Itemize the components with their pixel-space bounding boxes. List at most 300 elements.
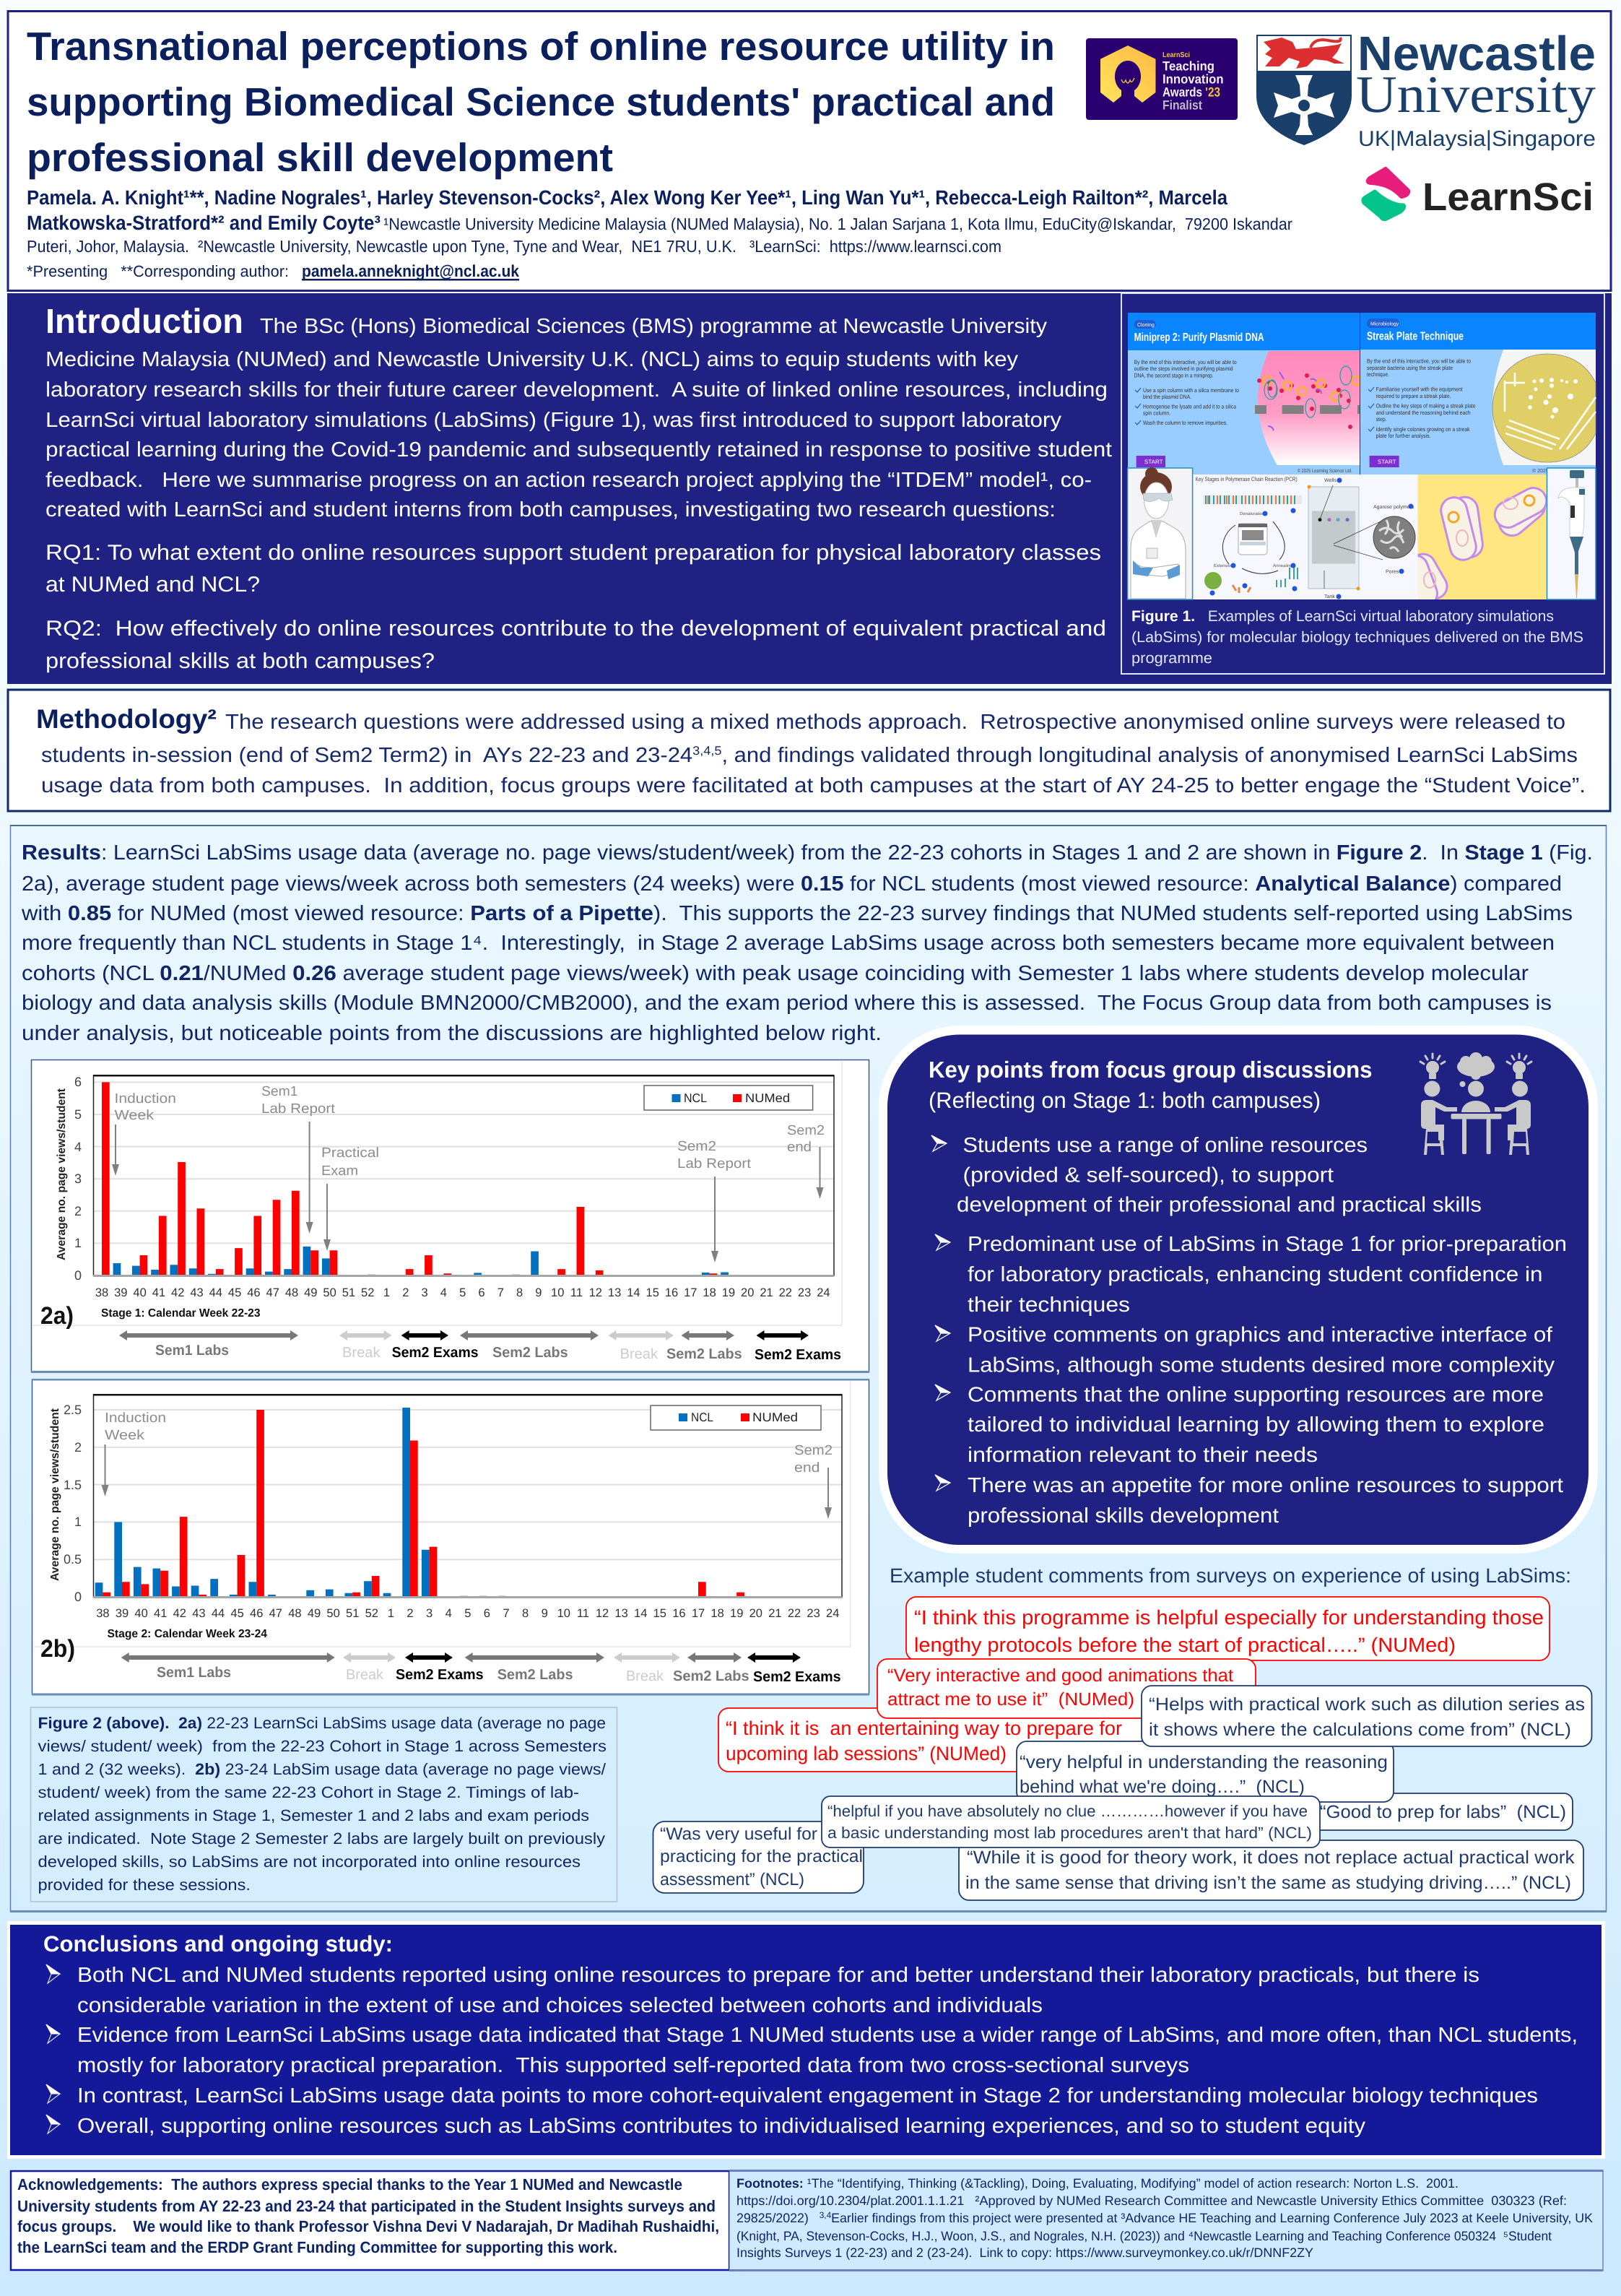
figure 1: miniprep screenshot: bind the plasmid DNA. [1143, 394, 1191, 400]
figure 1: miniprep screenshot [1128, 313, 1360, 475]
2b x axis: 24 [826, 1607, 839, 1620]
2b x axis: 42 [173, 1607, 186, 1620]
authors and affiliations: ¹Newcastle University Medicine Malaysia (NUMed Malaysia), No. 1 Jalan Sarjana 1, Kota Ilmu, EduCity@Iskandar, 79200 Iskandar [383, 215, 1292, 233]
2a y axis: 1 [74, 1236, 82, 1250]
comment: NCL reasoning [1017, 1741, 1394, 1802]
figure 1: streak plate screenshot: By the end of this interactive, you will be able to [1367, 358, 1471, 365]
2a legend: NUMed [745, 1091, 790, 1105]
authors and affiliations: Matkowska-Stratford*² and Emily Coyte³ [27, 212, 381, 234]
2b x axis: 17 [692, 1607, 705, 1620]
key points heading [929, 1057, 1372, 1113]
figure 1: streak plate screenshot: separate bacteria using the streak plate [1367, 365, 1453, 371]
comment: NCL driving analogy: in the same sense that driving isn’t the same as studying driving…..” (NCL) [965, 1873, 1571, 1893]
2b x axis: 40 [134, 1607, 148, 1620]
figure 1: miniprep screenshot: spin column. [1143, 410, 1170, 417]
2a NCL bars [113, 1247, 729, 1275]
figure 2 caption [30, 1707, 617, 1902]
conclusions text: mostly for laboratory practical preparation. This supported self-reported data from two cross-sectional surveys [77, 2054, 1189, 2077]
2a x axis: 44 [209, 1286, 222, 1299]
figure 1: miniprep screenshot: outline the steps involved in purifying plasmid [1134, 365, 1233, 372]
2a x axis: 10 [551, 1286, 564, 1299]
2b annotations: Sem2 [794, 1443, 833, 1458]
2b y axis: Average no. page views/student [49, 1408, 61, 1581]
chart 2b [32, 1379, 869, 1696]
panel: footnotes: Insights Surveys 1 (22-23) and 2 (23-24). Link to copy: https://www.surveymonkey.co.uk/r/DNNF2ZY [736, 2245, 1313, 2260]
2b NCL bars [95, 1408, 506, 1597]
2b timeline: Break [626, 1668, 664, 1684]
key point statements [957, 1134, 1567, 1528]
authors and affiliations: pamela.anneknight@ncl.ac.uk [302, 261, 519, 280]
2a y axis: 0 [74, 1268, 82, 1283]
2a annotations [112, 1084, 825, 1262]
2b x axis: 13 [614, 1607, 628, 1620]
research questions [45, 541, 1106, 673]
2a x axis [95, 1286, 830, 1320]
2b x axis: 4 [446, 1607, 452, 1620]
2b x axis: Stage 2: Calendar Week 23-24 [107, 1628, 267, 1640]
key point statements: Students use a range of online resources [963, 1134, 1368, 1157]
figure 2 caption: views/ student/ week) from the 22-23 Cohort in Stage 1 across Semesters [38, 1737, 607, 1755]
conclusions text: Overall, supporting online resources such as LabSims contributes to individualised learning experiences, and so to student equity [77, 2115, 1366, 2138]
panel: methodology [8, 690, 1610, 811]
2b x axis: 9 [542, 1607, 548, 1620]
2a annotations: Week [114, 1108, 155, 1123]
key point statements: tailored to individual learning by allowing them to explore [968, 1413, 1544, 1437]
2b legend [651, 1405, 821, 1430]
introduction text: feedback. Here we summarise progress on an action research project applying the “ITDEM” model¹, co- [45, 469, 1092, 492]
figure 1: streak plate screenshot: Streak Plate Technique [1367, 331, 1464, 343]
conclusions text: Evidence from LearnSci LabSims usage data indicated that Stage 1 NUMed students use a wider range of LabSims, and more often, than NCL students, [77, 2024, 1578, 2047]
header panel [8, 12, 1611, 290]
logo: LearnSci: LearnSci [1422, 176, 1594, 219]
research questions: RQ1: To what extent do online resources support student preparation for physical laboratory classes [45, 541, 1101, 565]
2a annotations: Sem1 [261, 1084, 297, 1099]
comment: NUMed lengthy protocols [906, 1597, 1550, 1660]
logo: teaching innovation awards finalist: Teaching [1162, 59, 1214, 74]
2a x axis: 15 [646, 1286, 659, 1299]
2b x axis: 18 [710, 1607, 724, 1620]
2a x axis: 4 [440, 1286, 447, 1299]
methodology heading: Methodology² [36, 704, 217, 734]
2a x axis: 12 [589, 1286, 602, 1299]
2b x axis: 38 [96, 1607, 110, 1620]
2a timeline: Break [342, 1345, 381, 1361]
student comments [653, 1597, 1591, 1900]
2a y axis: 2 [74, 1204, 82, 1218]
2a x axis: 11 [570, 1286, 583, 1299]
2b annotations: end [794, 1460, 820, 1476]
2b x axis: 19 [730, 1607, 743, 1620]
figure 1: PCR and gel screenshot: Pores [1386, 569, 1399, 575]
2b x axis: 16 [672, 1607, 686, 1620]
2a label: 2a) [40, 1302, 74, 1330]
figure 1: streak plate screenshot: required to prepare a streak plate. [1376, 393, 1451, 399]
figure 1: streak plate screenshot: Identify single colonies growing on a streak [1376, 426, 1470, 433]
figure 1 caption: Figure 1. Examples of LearnSci virtual laboratory simulations [1131, 608, 1554, 625]
figure 1: miniprep screenshot: DNA, the second stage in a miniprep. [1134, 373, 1214, 379]
2b x axis: 7 [503, 1607, 510, 1620]
figure 2 caption: related assignments in Stage 1, Semester 1 and 2 labs and exam periods [38, 1806, 589, 1824]
2a x axis: 1 [383, 1286, 390, 1299]
2b x axis: 48 [288, 1607, 302, 1620]
figure 2 caption: developed skills, so LabSims are not incorporated into online resources [38, 1853, 581, 1871]
2a y axis [56, 1075, 82, 1283]
2b x axis: 52 [365, 1607, 378, 1620]
logo: teaching innovation awards finalist: Innovation [1162, 72, 1224, 87]
logo: teaching innovation awards finalist [1086, 38, 1238, 120]
2a timeline: Sem2 Exams [392, 1345, 479, 1361]
2a annotations: Induction [114, 1091, 176, 1106]
2b timeline: Sem2 Labs [497, 1667, 573, 1683]
panel: footnotes: https://doi.org/10.2304/plat.2001.1.1.21 ²Approved by NUMed Research Committee and Newcastle University Ethics Committee 030323 (Ref: [736, 2193, 1567, 2208]
figure 1: PCR and gel screenshot: Tank [1324, 594, 1335, 599]
2a timeline: Sem2 Labs [492, 1345, 568, 1361]
2a x axis: 5 [459, 1286, 466, 1299]
2b x axis: 10 [557, 1607, 570, 1620]
key point statements: their techniques [968, 1294, 1130, 1317]
2a x axis: 49 [304, 1286, 317, 1299]
key points heading: (Reflecting on Stage 1: both campuses) [929, 1088, 1321, 1113]
2a x axis: 7 [497, 1286, 504, 1299]
conclusions bullets [46, 1964, 60, 2133]
2a annotations: Sem2 [677, 1139, 716, 1154]
introduction text: The BSc (Hons) Biomedical Sciences (BMS) programme at Newcastle University [260, 315, 1048, 338]
conclusions text: Both NCL and NUMed students reported using online resources to prepare for and better understand their laboratory practicals, but there is [77, 1964, 1479, 1987]
key point statements: Comments that the online supporting resources are more [968, 1384, 1544, 1407]
key point statements: professional skills development [968, 1504, 1279, 1528]
2b x axis: 3 [426, 1607, 433, 1620]
2b y axis: 1 [74, 1515, 82, 1529]
2a x axis: 39 [114, 1286, 127, 1299]
2a annotations: Lab Report [677, 1156, 752, 1171]
introduction text: Introduction [45, 303, 243, 341]
chart 2a [31, 1060, 869, 1373]
comment: NCL absolutely no clue: “helpful if you have absolutely no clue …………however if you have [827, 1802, 1308, 1820]
figure 1: PCR and gel screenshot [1193, 475, 1418, 599]
comment: NUMed entertaining way: upcoming lab sessions” (NUMed) [726, 1743, 1007, 1764]
logo: teaching innovation awards finalist: Finalist [1162, 98, 1202, 113]
figure 1: PCR and gel screenshot: Extension [1214, 563, 1233, 568]
figure 1: PCR and gel screenshot: Key Stages in Polymerase Chain Reaction (PCR) [1196, 476, 1298, 482]
key point statements: LabSims, although some students desired more complexity [968, 1353, 1555, 1377]
panel: footnotes: Earlier findings from this project were presented at ³Advance HE Teaching and Learning Conference July 2023 at Keele University, UK [831, 2211, 1593, 2225]
2a x axis: 13 [608, 1286, 621, 1299]
2a x axis: 16 [665, 1286, 678, 1299]
2b x axis: 12 [596, 1607, 609, 1620]
figure 1: miniprep screenshot: START [1144, 459, 1163, 465]
2a x axis: 24 [817, 1286, 830, 1299]
panel: acknowledgements: focus groups. We would like to thank Professor Vishna Devi V Nadarajah, Dr Madihah Rushaidhi, [17, 2217, 719, 2235]
logo: teaching innovation awards finalist: LearnSci [1162, 51, 1190, 59]
2a NUMed bars [102, 1082, 717, 1275]
results text: cohorts (NCL 0.21/NUMed 0.26 average student page views/week) with peak usage coinciding with Semester 1 labs where students develop molecular [22, 962, 1529, 985]
figure 1 panel [1121, 293, 1604, 674]
comment: NCL absolutely no clue: a basic understanding most lab procedures aren't that hard” (NCL) [827, 1824, 1312, 1842]
figure 1 caption: (LabSims) for molecular biology techniques delivered on the BMS [1131, 629, 1583, 646]
2a x axis: 22 [779, 1286, 792, 1299]
figure 1: streak plate screenshot: Familiarise yourself with the equipment [1376, 386, 1463, 393]
2b y axis: 0.5 [64, 1552, 82, 1567]
2a legend: NCL [684, 1091, 707, 1105]
methodology text: The research questions were addressed using a mixed methods approach. Retrospective anonymised online surveys were released to [225, 711, 1565, 734]
comment: NCL dilution series: “Helps with practical work such as dilution series as [1149, 1694, 1585, 1715]
2b x axis [96, 1607, 839, 1640]
conclusions text: In contrast, LearnSci LabSims usage data points to more cohort-equivalent engagement in Stage 2 for understanding molecular biology techniques [77, 2084, 1538, 2107]
2b x axis: 1 [388, 1607, 394, 1620]
2b NUMed bars [103, 1410, 744, 1597]
panel: acknowledgements: University students from AY 22-23 and 23-24 that participated in the Student Insights surveys and [17, 2197, 716, 2215]
key point statements: (provided & self-sourced), to support [963, 1164, 1334, 1187]
2a annotations: Exam [321, 1164, 358, 1179]
2a x axis: 38 [95, 1286, 108, 1299]
2b x axis: 49 [308, 1607, 321, 1620]
2b x axis: 43 [192, 1607, 206, 1620]
2a x axis: 46 [247, 1286, 261, 1299]
2a x axis: 21 [760, 1286, 773, 1299]
panel: results [10, 825, 1607, 1912]
2a x axis: 20 [741, 1286, 754, 1299]
figure 1 caption [1131, 608, 1583, 667]
2b x axis: 50 [326, 1607, 340, 1620]
2b y axis: 2.5 [64, 1403, 82, 1417]
methodology text: students in-session (end of Sem2 Term2) in AYs 22-23 and 23-24 [41, 744, 651, 767]
comment: NCL practical assessment: assessment” (NCL) [660, 1870, 804, 1889]
comment: NCL practical assessment [653, 1821, 864, 1893]
panel: footnotes: Footnotes: ¹The “Identifying, Thinking (&Tackling), Doing, Evaluating, Modifying” model of action research: Norton L.S. 2001. [736, 2176, 1459, 2191]
comment: NCL good to prep: “Good to prep for labs” (NCL) [1320, 1802, 1566, 1822]
2b timeline: Sem2 Exams [753, 1669, 841, 1685]
student comments heading: Example student comments from surveys on experience of using LabSims: [890, 1564, 1571, 1587]
comment: NCL reasoning: behind what we're doing….” (NCL) [1020, 1777, 1305, 1797]
logo: LearnSci [1363, 169, 1594, 220]
2a x axis: 23 [798, 1286, 811, 1299]
2a legend [644, 1086, 813, 1110]
comment: NUMed lengthy protocols: lengthy protocols before the start of practical…..” (NUMed) [914, 1634, 1456, 1656]
2b x axis: 8 [522, 1607, 529, 1620]
panel: footnotes: 3,4 [820, 2210, 831, 2220]
comment: NCL absolutely no clue [822, 1796, 1320, 1847]
2a y axis: 3 [74, 1171, 82, 1186]
research questions: RQ2: How effectively do online resources contribute to the development of equivalent practical and [45, 617, 1106, 641]
2a x axis: 2 [402, 1286, 409, 1299]
2b x axis: 44 [212, 1607, 225, 1620]
comment: NUMed entertaining way [718, 1708, 1144, 1772]
2a x axis: 9 [535, 1286, 542, 1299]
2b timeline: Sem1 Labs [157, 1665, 231, 1681]
2a x axis: 8 [516, 1286, 523, 1299]
key point statements: for laboratory practicals, enhancing student confidence in [968, 1263, 1542, 1286]
2b timeline: Break [346, 1667, 384, 1683]
2a x axis: 19 [722, 1286, 735, 1299]
figure 1: streak plate screenshot [1360, 313, 1596, 475]
figure 1: streak plate screenshot: step. [1376, 416, 1387, 423]
2a x axis: 42 [171, 1286, 184, 1299]
2b x axis: 23 [807, 1607, 820, 1620]
2a x axis: 50 [323, 1286, 336, 1299]
comment: NCL dilution series: it shows where the calculations come from” (NCL) [1149, 1720, 1571, 1740]
2b legend: NCL [691, 1411, 713, 1424]
2a y axis: Average no. page views/student [56, 1088, 68, 1260]
figure 1: scientist illustration [1128, 467, 1193, 599]
research questions: professional skills at both campuses? [45, 649, 435, 673]
figure 1: streak plate screenshot: technique. [1367, 371, 1389, 378]
2b x axis: 20 [749, 1607, 762, 1620]
2a x axis: 47 [266, 1286, 279, 1299]
figure 1: miniprep screenshot: Use a spin column with a silica membrane to [1143, 387, 1239, 394]
figure 1: streak plate screenshot: plate for further analysis. [1376, 433, 1431, 439]
title: Transnational perceptions of online resource utility in [27, 24, 1055, 69]
2a annotations: end [787, 1140, 812, 1155]
bullet arrows [931, 1135, 950, 1491]
panel: footnotes: 29825/2022) [736, 2211, 809, 2225]
methodology text: usage data from both campuses. In addition, focus groups were facilitated at both campuses at the start of AY 24-25 to better engage the “Student Voice”. [41, 774, 1586, 797]
2a x axis: 3 [422, 1286, 428, 1299]
2a x axis: Stage 1: Calendar Week 22-23 [101, 1307, 261, 1320]
results text: Results: LearnSci LabSims usage data (average no. page views/student/week) from the 22-23 cohorts in Stages 1 and 2 are shown in Figure 2. In Stage 1 (Fig. [22, 841, 1593, 865]
figure 2 caption: 1 and 2 (32 weeks). 2b) 23-24 LabSim usage data (average no page views/ [38, 1760, 607, 1778]
authors and affiliations [27, 186, 1292, 280]
key point statements: development of their professional and practical skills [957, 1193, 1482, 1216]
2b x axis: 15 [653, 1607, 666, 1620]
results text [21, 841, 1593, 1045]
2a x axis: 41 [152, 1286, 165, 1299]
comment: NCL driving analogy: “While it is good for theory work, it does not replace actual practical work [967, 1847, 1575, 1868]
figure 1: streak plate screenshot: START [1378, 459, 1396, 465]
introduction text: laboratory research skills for their future career development. A suite of linked online resources, including [45, 378, 1108, 402]
figure 2 caption: student/ week) from the same 22-23 Cohort in Stage 2. Timings of lab- [38, 1783, 579, 1801]
title: professional skill development [27, 135, 613, 180]
logo: Newcastle University [1256, 27, 1596, 151]
authors and affiliations: Pamela. A. Knight¹**, Nadine Nograles¹, Harley Stevenson-Cocks², Alex Wong Ker Yee*¹, Ling Wan Yu*¹, Rebecca-Leigh Railton*², Marcela [27, 186, 1227, 209]
2b x axis: 46 [250, 1607, 263, 1620]
figure 1: PCR and gel screenshot: Wells [1324, 477, 1337, 483]
results text: with 0.85 for NUMed (most viewed resource: Parts of a Pipette ). This supports the 22-23 survey findings that NUMed students self-reported using LabSims [21, 902, 1573, 925]
comment: NCL driving analogy [959, 1840, 1583, 1900]
conclusions text: considerable variation in the extent of use and choices selected between cohorts and individuals [77, 1994, 1043, 2017]
2b x axis: 22 [788, 1607, 801, 1620]
2b timeline: Sem2 Exams [396, 1667, 484, 1683]
2a x axis: 52 [361, 1286, 374, 1299]
2b annotations: Induction [105, 1411, 166, 1426]
figure 1: miniprep screenshot: Homogenise the lysate and add it to a silica [1143, 404, 1236, 410]
2b y axis: 0 [74, 1590, 82, 1604]
panel: footnotes [729, 2170, 1603, 2271]
comment: NUMed lengthy protocols: “I think this programme is helpful especially for understanding those [914, 1606, 1544, 1629]
panel: acknowledgements: Acknowledgements: The authors express special thanks to the Year 1 NUMed and Newcastle [17, 2175, 682, 2193]
2a x axis: 6 [478, 1286, 485, 1299]
key point statements: Predominant use of LabSims in Stage 1 for prior-preparation [968, 1233, 1567, 1256]
2b x axis: 51 [346, 1607, 359, 1620]
figure 1: streak plate screenshot: Microbiology [1370, 321, 1399, 326]
2b timeline [121, 1652, 841, 1685]
2b y axis: 2 [74, 1440, 82, 1455]
key point statements: There was an appetite for more online resources to support [968, 1474, 1563, 1497]
comment: NUMed interactive animations [877, 1659, 1256, 1718]
logo: teaching innovation awards finalist: Awards '23 [1162, 85, 1220, 100]
2a x axis: 51 [342, 1286, 355, 1299]
comment: NCL good to prep [1307, 1793, 1573, 1830]
key points heading: Key points from focus group discussions [929, 1057, 1372, 1083]
comment: NUMed interactive animations: attract me to use it” (NUMed) [887, 1689, 1134, 1710]
figure 2 caption: Figure 2 (above). 2a) 22-23 LearnSci LabSims usage data (average no page [38, 1714, 606, 1732]
introduction text: Medicine Malaysia (NUMed) and Newcastle University U.K. (NCL) aims to equip students with key [45, 348, 1019, 371]
key point statements: information relevant to their needs [968, 1444, 1318, 1467]
research questions: at NUMed and NCL? [45, 573, 260, 597]
2b x axis: 47 [269, 1607, 282, 1620]
results text: under analysis, but noticeable points from the discussions are highlighted below right. [22, 1022, 882, 1045]
2b x axis: 14 [634, 1607, 647, 1620]
key point statements: Positive comments on graphics and interactive interface of [968, 1323, 1553, 1346]
figure 1: streak plate screenshot: and understand the reasoning behind each [1376, 410, 1471, 416]
authors and affiliations: *Presenting **Corresponding author: [27, 262, 289, 280]
figure 1: miniprep screenshot: Miniprep 2: Purify Plasmid DNA [1134, 332, 1264, 344]
authors and affiliations: Puteri, Johor, Malaysia. ²Newcastle University, Newcastle upon Tyne, Tyne and Wear, NE1 7RU, U.K. ³LearnSci: https://www.learnsci.com [27, 237, 1001, 256]
comment: NUMed interactive animations: “Very interactive and good animations that [887, 1665, 1233, 1686]
2b label: 2b) [40, 1635, 75, 1663]
figure 1: bacteria illustration [1418, 475, 1547, 599]
2a annotations: Lab Report [261, 1101, 336, 1117]
comment: NCL dilution series [1142, 1686, 1591, 1746]
figure 1: miniprep screenshot: © 2025 Learning Science Ltd. [1298, 468, 1352, 474]
logo: Newcastle University: UK|Malaysia|Singapore [1358, 127, 1596, 151]
panel: introduction [7, 293, 1612, 684]
figure 1 caption: programme [1131, 650, 1212, 667]
comment: NCL reasoning: “very helpful in understanding the reasoning [1020, 1752, 1388, 1772]
introduction text: LearnSci virtual laboratory simulations (LabSims) (Figure 1), was first introduced to support laboratory [45, 409, 1062, 432]
2b legend: NUMed [752, 1411, 798, 1424]
2a y axis: 6 [74, 1075, 82, 1089]
2a x axis: 43 [190, 1286, 204, 1299]
methodology text: , and findings validated through longitudinal analysis of anonymised LearnSci LabSims [721, 744, 1578, 767]
2a x axis: 45 [228, 1286, 241, 1299]
figure 1: PCR and gel screenshot: Denaturation [1240, 511, 1264, 516]
2a timeline: Sem1 Labs [155, 1343, 229, 1359]
introduction text: practical learning during the Covid-19 pandemic and subsequently retained in response to positive student [45, 438, 1112, 462]
2b x axis: 2 [407, 1607, 414, 1620]
title [27, 24, 1055, 180]
2b x axis: 21 [768, 1607, 782, 1620]
panel: footnotes: (Knight, PA, Stevenson-Cocks, H.J., Woon, J.S., and Nograles, N.H. (2023)) and ⁴Newcastle Learning and Teaching Conference 050324 ⁵Student [736, 2229, 1552, 2243]
2b x axis: 41 [154, 1607, 167, 1620]
2a timeline: Break [620, 1346, 659, 1362]
methodology text: 3,4,5 [692, 744, 721, 758]
2b y axis: 1.5 [64, 1478, 82, 1492]
logo: Newcastle University: Newcastle [1357, 27, 1596, 81]
results text: biology and data analysis skills (Module BMN2000/CMB2000), and the exam period where this is assessed. The Focus Group data from both campuses is [22, 992, 1552, 1015]
panel: acknowledgements [11, 2171, 729, 2270]
panel: conclusions [7, 1921, 1605, 2159]
2b timeline: Sem2 Labs [673, 1668, 749, 1684]
2b x axis: 39 [116, 1607, 129, 1620]
figure 1: miniprep screenshot: Cloning [1137, 322, 1155, 328]
conclusions heading: Conclusions and ongoing study: [43, 1931, 393, 1957]
figure 1: streak plate screenshot: © 2025 [1532, 469, 1549, 474]
2b x axis: 11 [577, 1607, 589, 1620]
2a timeline: Sem2 Exams [755, 1347, 841, 1363]
figure 1: PCR and gel screenshot: Annealing [1273, 563, 1292, 568]
results text: more frequently than NCL students in Stage 1⁴. Interestingly, in Stage 2 average LabSims usage across both semesters became more equivalent between [22, 932, 1555, 955]
2b y axis [49, 1403, 82, 1604]
2a timeline: Sem2 Labs [666, 1346, 742, 1362]
figure 2 caption: are indicated. Note Stage 2 Semester 2 labs are largely built on previously [38, 1829, 605, 1847]
comment: NCL practical assessment: practicing for the practical [660, 1847, 863, 1866]
2a x axis: 14 [627, 1286, 640, 1299]
panel: key points from focus groups [879, 1026, 1598, 1554]
introduction text [45, 303, 1112, 521]
2a annotations: Practical [321, 1145, 379, 1161]
figure 1: PCR and gel screenshot: Agarose polymers [1373, 504, 1414, 510]
2b annotations [101, 1411, 833, 1519]
